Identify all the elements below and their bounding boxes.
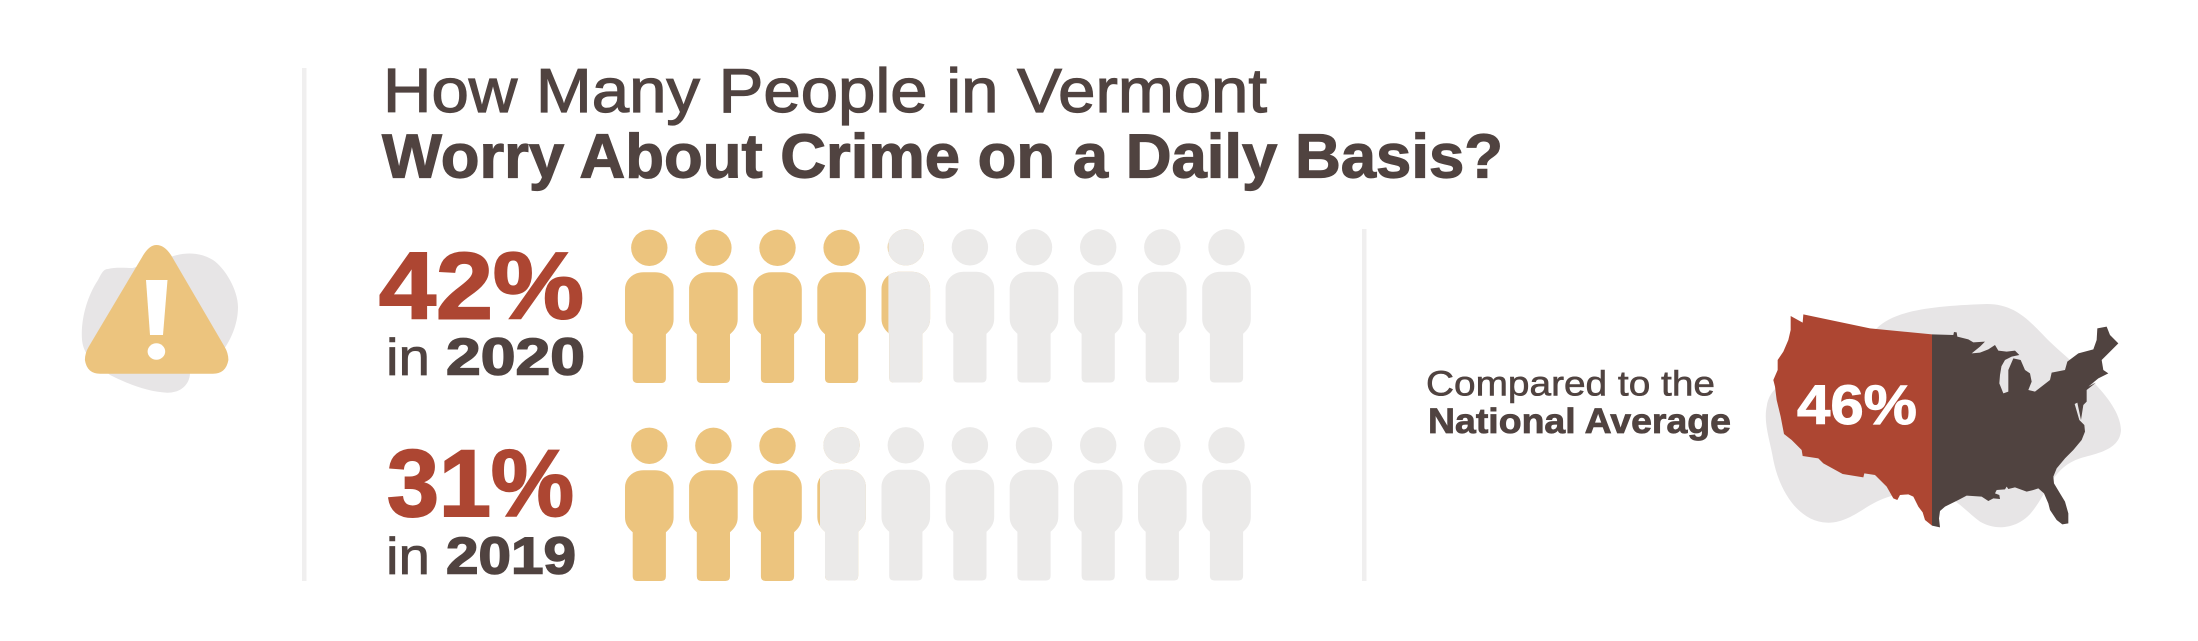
title	[382, 57, 1503, 192]
stat: 42% in 2020: 42%	[379, 234, 584, 340]
map: United States, 46 percent	[1766, 304, 2121, 527]
stat: 42% in 2020: 2020	[446, 328, 585, 386]
label: compared to the national average: Compared to the	[1426, 364, 1715, 404]
stat: 31% in 2019: in	[386, 528, 430, 586]
stat: 42% in 2020	[379, 234, 585, 387]
icon: warning triangle	[82, 245, 238, 393]
stat: 31% in 2019	[386, 431, 576, 586]
pictogram: 2020, 42 percent	[625, 229, 1251, 383]
label: compared to the national average: National Average	[1428, 402, 1731, 441]
map: United States, 46 percent: 46%	[1797, 373, 1917, 436]
label: compared to the national average	[1426, 364, 1731, 441]
stat: 42% in 2020: in	[386, 329, 430, 387]
pictogram: 2019, 31 percent	[625, 427, 1251, 581]
stat: 31% in 2019: 31%	[387, 431, 574, 537]
title: Worry About Crime on a Daily Basis?	[382, 122, 1503, 192]
title: How Many People in Vermont	[383, 57, 1267, 126]
stat: 31% in 2019: 2019	[446, 528, 576, 586]
